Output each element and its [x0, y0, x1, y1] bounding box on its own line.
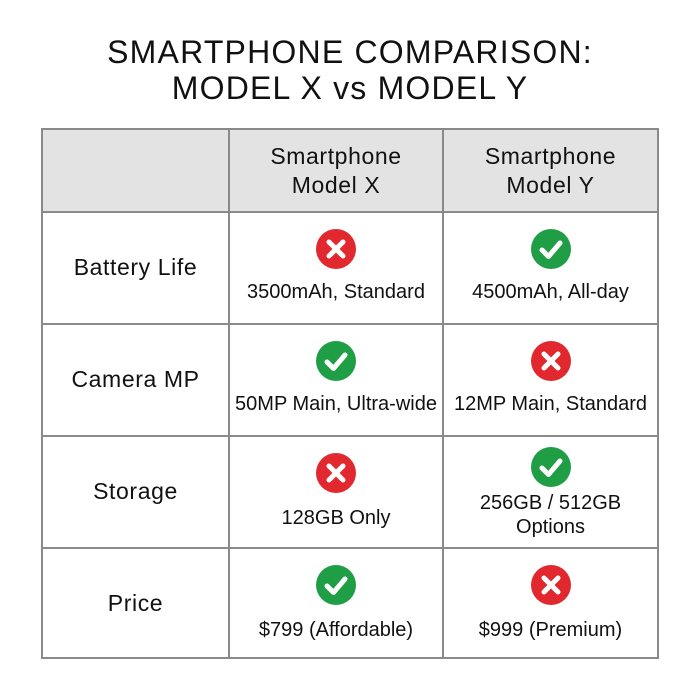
header: Model Y: Model Y [506, 172, 595, 198]
row label: Storage: Storage [93, 478, 178, 504]
text price X: $799 (Affordable) [259, 619, 413, 641]
row label: Camera MP: Camera MP [71, 366, 200, 392]
title: MODEL X vs MODEL Y [172, 70, 528, 106]
icon: check battery Y [531, 229, 571, 269]
header: Model Y: Smartphone [485, 143, 616, 169]
text storage X: 128GB Only [282, 507, 390, 529]
icon: check camera X [316, 341, 356, 381]
text storage Y [480, 492, 621, 538]
text battery Y: 4500mAh, All-day [472, 281, 629, 303]
text camera Y: 12MP Main, Standard [454, 393, 647, 415]
icon: cross price Y [531, 565, 571, 605]
header row background [43, 130, 657, 211]
icon: check price X [316, 565, 356, 605]
row label: Battery Life: Battery Life [74, 254, 197, 280]
text battery X: 3500mAh, Standard [247, 281, 425, 303]
comparison table [41, 128, 659, 659]
icon: cross camera Y [531, 341, 571, 381]
text camera X: 50MP Main, Ultra-wide [235, 393, 437, 415]
text price Y: $999 (Premium) [479, 619, 622, 641]
icon: check storage Y [531, 447, 571, 487]
header: Model X: Smartphone [270, 143, 402, 169]
icon: cross storage X [316, 453, 356, 493]
header: Model X [270, 143, 402, 198]
text storage Y: 256GB / 512GB [480, 492, 621, 514]
icon: cross battery X [316, 229, 356, 269]
title [107, 34, 593, 106]
text storage Y: Options [516, 516, 585, 538]
row label: Price: Price [108, 590, 163, 616]
header: Model Y [485, 143, 616, 198]
title: SMARTPHONE COMPARISON: [107, 34, 593, 70]
header: Model X: Model X [292, 172, 380, 198]
